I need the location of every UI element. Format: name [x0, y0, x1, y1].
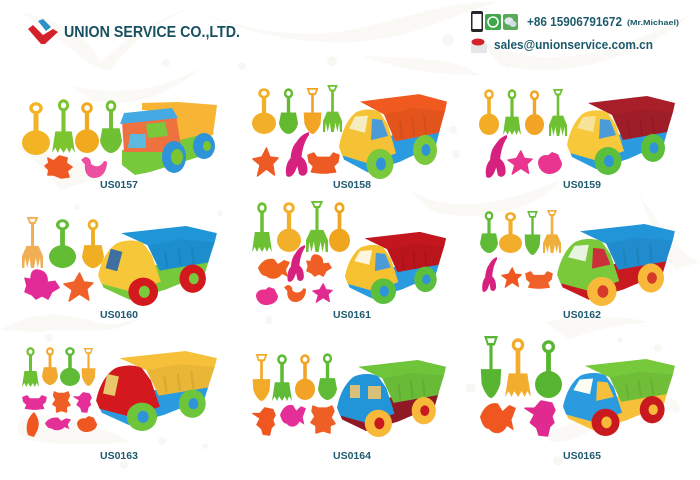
- lobster: [482, 257, 497, 292]
- seahorse: [74, 393, 91, 412]
- truck: [339, 94, 447, 179]
- icon: email: [471, 38, 487, 53]
- contact name: (Mr.Michael): [627, 18, 680, 27]
- seahorse: [525, 401, 555, 436]
- starfish: [508, 151, 532, 174]
- truck: [98, 226, 217, 306]
- icon: whatsapp: [485, 14, 501, 30]
- fork: [306, 202, 328, 252]
- duck mould: [81, 157, 107, 178]
- panel: US0165: [480, 337, 675, 462]
- rake: [252, 204, 272, 252]
- crab: [23, 396, 46, 409]
- company name: UNION SERVICE CO.,LTD.: [64, 24, 240, 41]
- spade: [279, 90, 298, 134]
- truck: [337, 360, 446, 437]
- scoop: [525, 92, 544, 135]
- fish: [45, 417, 71, 430]
- label: US0165: [563, 450, 601, 462]
- spade: [100, 102, 122, 153]
- sticker: [103, 374, 119, 396]
- spade: [42, 348, 58, 385]
- shovel: [253, 355, 270, 401]
- starfish: [502, 268, 521, 287]
- label: US0164: [333, 450, 371, 462]
- label: US0161: [333, 309, 371, 321]
- shovel: [82, 221, 104, 268]
- rake: [22, 348, 39, 387]
- starfish: [253, 148, 278, 176]
- email address: sales@unionservice.com.cn: [494, 38, 653, 52]
- turtle mould: [45, 156, 72, 178]
- fork: [549, 90, 567, 136]
- shovel: [481, 337, 501, 398]
- rake: [503, 91, 521, 135]
- sticker: [106, 249, 122, 271]
- lobster: [287, 245, 305, 282]
- shell: [538, 152, 562, 174]
- clam: [77, 416, 97, 432]
- scoop: [329, 204, 350, 252]
- label: US0160: [100, 309, 138, 321]
- logo: [28, 19, 58, 44]
- scoop: [479, 91, 499, 135]
- shovel: [304, 89, 321, 134]
- label: US0162: [563, 309, 601, 321]
- background dots: [45, 34, 662, 469]
- fork: [22, 218, 43, 268]
- starfish: [64, 273, 93, 301]
- seahorse: [253, 408, 275, 435]
- truck: [345, 232, 446, 304]
- spade: [318, 355, 337, 400]
- label: US0157: [100, 179, 138, 191]
- rake: [505, 340, 531, 397]
- duck: [284, 285, 306, 302]
- scoop: [49, 221, 76, 268]
- panel: US0160: [22, 218, 217, 321]
- fish: [280, 405, 306, 427]
- scoop: [60, 348, 80, 386]
- octopus: [25, 270, 59, 299]
- scoop: [535, 342, 562, 398]
- scoop: [252, 90, 276, 134]
- crab: [526, 272, 552, 288]
- scoop: [75, 104, 99, 153]
- fork: [323, 86, 342, 132]
- icon: wechat: [503, 14, 518, 30]
- scoop: [499, 213, 522, 253]
- scoop: [277, 204, 301, 252]
- stickers: [350, 385, 381, 399]
- spade: [480, 212, 498, 253]
- panel: US0164: [253, 355, 446, 462]
- panel: US0163: [22, 348, 217, 462]
- scoop: [22, 104, 50, 155]
- label: US0158: [333, 179, 371, 191]
- shell: [27, 412, 39, 437]
- truck: [120, 102, 217, 175]
- shovel: [82, 349, 95, 386]
- fork: [543, 211, 561, 253]
- icon: phone: [471, 11, 483, 32]
- fish: [480, 403, 516, 433]
- bear: [53, 392, 70, 412]
- rake: [52, 101, 75, 153]
- fish: [258, 259, 290, 279]
- lobster: [486, 135, 507, 178]
- truck: [563, 359, 675, 436]
- panel: US0158: [252, 86, 447, 191]
- panel: US0162: [480, 211, 675, 321]
- phone number: +86 15906791672: [527, 15, 622, 29]
- panel: US0159: [479, 90, 675, 191]
- bear: [311, 406, 335, 433]
- truck: [567, 96, 675, 175]
- truck: [96, 351, 217, 431]
- shell: [256, 287, 278, 305]
- octopus: [307, 255, 331, 276]
- truck: [557, 224, 675, 306]
- scoop: [295, 356, 315, 400]
- panel: US0157: [22, 101, 217, 191]
- lobster: [286, 132, 309, 177]
- panel: US0161: [252, 202, 446, 321]
- label: US0159: [563, 179, 601, 191]
- crab: [308, 153, 339, 173]
- rake: [272, 356, 292, 401]
- label: US0163: [100, 450, 138, 462]
- starfish: [313, 284, 332, 302]
- shovel: [525, 212, 540, 255]
